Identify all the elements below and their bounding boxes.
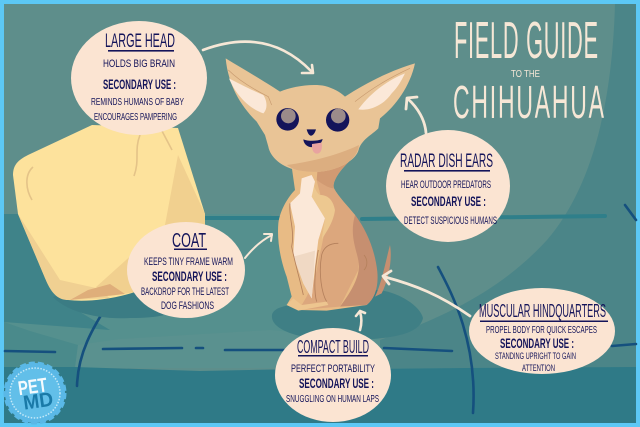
pillow shadow bbox=[53, 280, 190, 318]
rear shading bbox=[340, 215, 378, 307]
panel: compact build bbox=[275, 328, 391, 422]
nose bbox=[307, 129, 316, 136]
panel: coat: DOG FASHIONS bbox=[161, 300, 214, 312]
panel: radar dish ears: SECONDARY USE : bbox=[411, 194, 486, 209]
chihuahua body bbox=[278, 160, 391, 311]
light chest fold bbox=[312, 180, 335, 240]
title: TO THE bbox=[511, 69, 540, 80]
panel: coat: SECONDARY USE : bbox=[152, 269, 227, 284]
head and ears bbox=[226, 58, 415, 172]
logo: PetMD badge: MD bbox=[22, 389, 55, 415]
leg details bbox=[290, 203, 367, 302]
panel: compact build: SNUGGLING ON HUMAN LAPS bbox=[286, 393, 379, 405]
right inner ear bbox=[358, 73, 405, 110]
heading: coat: COAT bbox=[172, 230, 206, 252]
panel: coat: BACKDROP FOR THE LATEST bbox=[141, 286, 229, 298]
white chest bbox=[290, 175, 325, 298]
panel: large head: REMINDS HUMANS OF BABY bbox=[91, 96, 184, 108]
arrow: muscular hindquarters bbox=[383, 271, 470, 316]
paws bbox=[287, 298, 328, 311]
panel: coat bbox=[127, 222, 245, 318]
haunch bbox=[298, 180, 359, 310]
panel: large head: ENCOURAGES PAMPERING bbox=[94, 111, 177, 123]
neck shading bbox=[317, 160, 351, 188]
arrow: coat bbox=[245, 234, 272, 258]
panel: compact build: COMPACT BUILD bbox=[297, 337, 369, 357]
heading: large head: LARGE HEAD bbox=[105, 31, 175, 52]
pillow bbox=[13, 125, 205, 301]
panel: muscular hindquarters: ATTENTION bbox=[522, 363, 555, 373]
heading: radar dish ears: RADAR DISH EARS bbox=[400, 151, 493, 172]
left inner ear bbox=[229, 78, 266, 113]
logo: PetMD badge bbox=[5, 363, 65, 423]
right eye bbox=[326, 108, 349, 132]
floor lines bbox=[5, 205, 636, 413]
panel: large head: HOLDS BIG BRAIN bbox=[103, 58, 175, 70]
mouth bbox=[303, 139, 323, 147]
left eye bbox=[276, 108, 299, 131]
panel: compact build: SECONDARY USE : bbox=[299, 376, 374, 391]
panel: large head: SECONDARY USE : bbox=[103, 76, 176, 92]
body silhouette bbox=[278, 160, 377, 311]
panel: muscular hindquarters: SECONDARY USE : bbox=[500, 335, 574, 351]
title: FIELD GUIDE bbox=[454, 12, 598, 70]
dog shadow bbox=[272, 290, 423, 340]
title bbox=[453, 12, 604, 128]
tongue bbox=[312, 143, 322, 154]
panel: coat: KEEPS TINY FRAME WARM bbox=[144, 256, 233, 268]
logo: PetMD badge: PET bbox=[17, 374, 49, 400]
panel: radar dish ears: HEAR OUTDOOR PREDATORS bbox=[401, 179, 491, 191]
arrow: large head bbox=[203, 42, 313, 73]
panel: muscular hindquarters: STANDING UPRIGHT TO GAIN bbox=[495, 351, 576, 361]
panel: muscular hindquarters bbox=[469, 288, 615, 374]
panel: radar dish ears: DETECT SUSPICIOUS HUMANS bbox=[404, 215, 497, 227]
title: CHIHUAHUA bbox=[453, 76, 604, 128]
arrow: radar dish ears bbox=[406, 97, 426, 133]
chihuahua head bbox=[226, 58, 415, 172]
chest shadow bbox=[293, 251, 315, 298]
ear creases bbox=[228, 68, 410, 105]
lower face shading bbox=[287, 145, 359, 172]
arrow: compact build bbox=[356, 311, 365, 330]
panel: large head bbox=[71, 21, 207, 135]
panel: radar dish ears bbox=[386, 130, 510, 242]
tail bbox=[375, 245, 391, 297]
panel: compact build: PERFECT PORTABILITY bbox=[291, 363, 375, 375]
